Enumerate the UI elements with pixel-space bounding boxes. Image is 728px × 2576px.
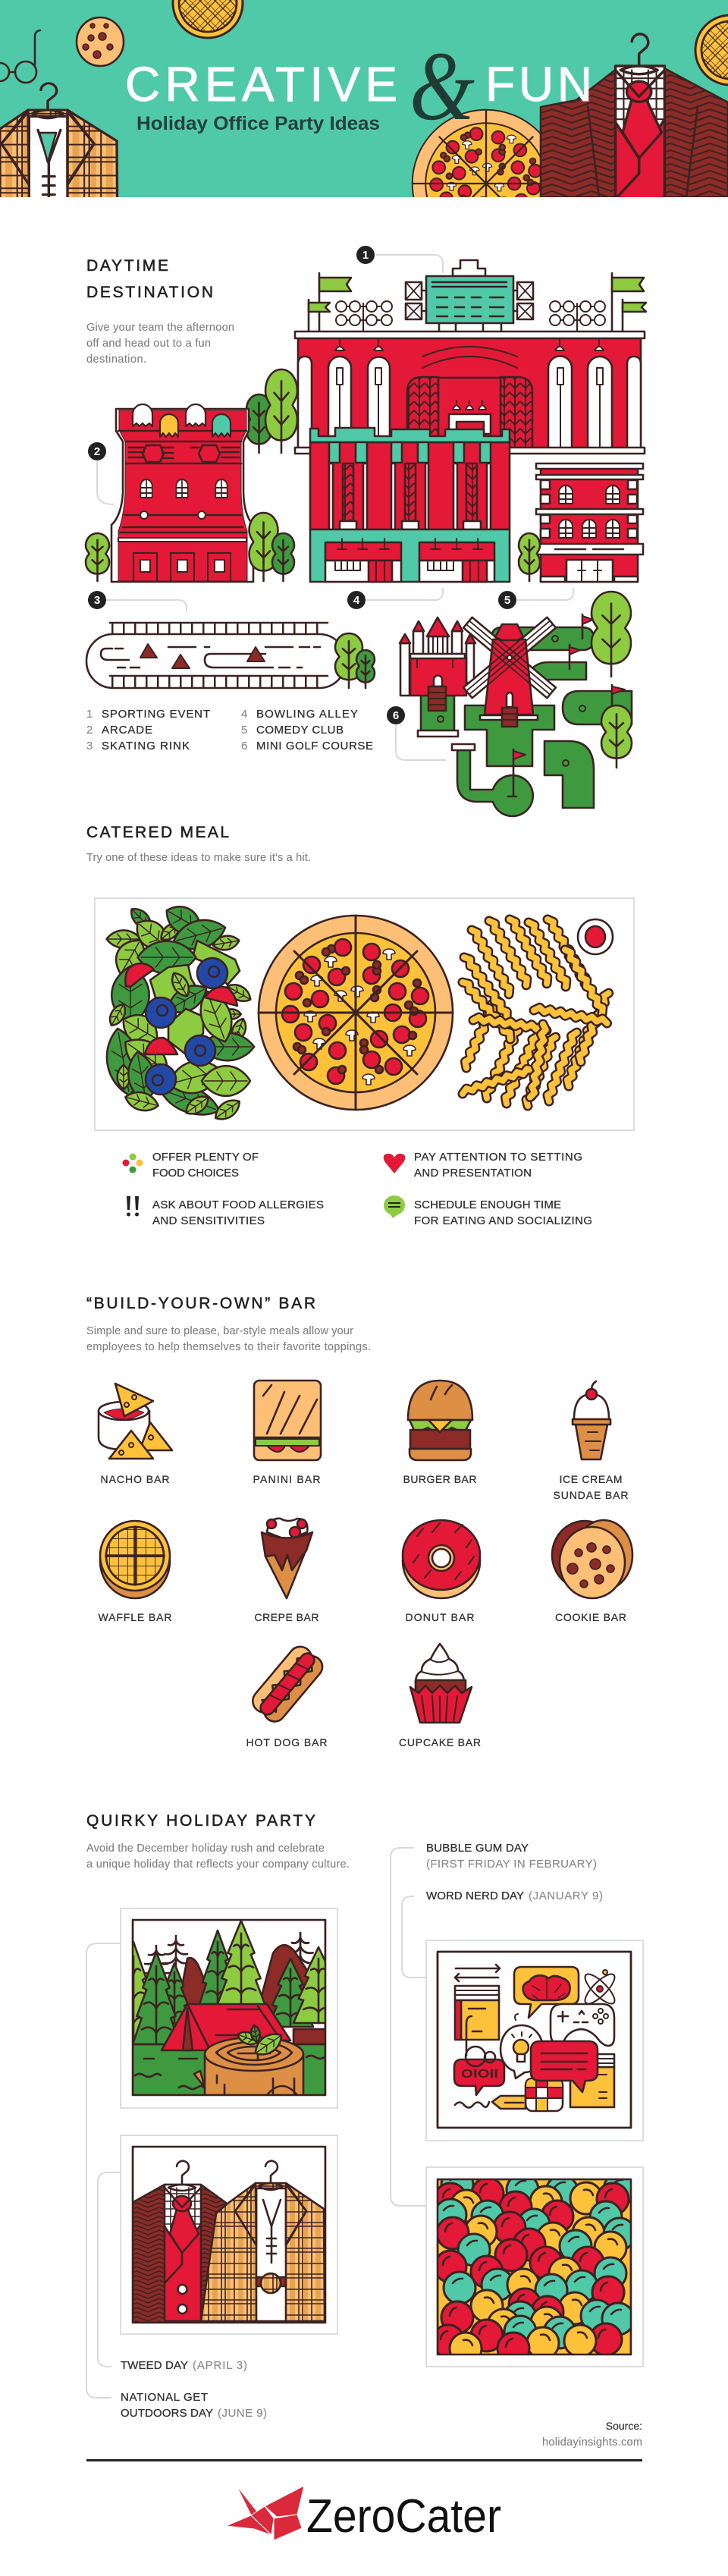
illustration: pizza (259, 916, 453, 1110)
footer rule (86, 2459, 642, 2461)
panel: bubble gum balls (426, 2167, 643, 2367)
icon: cupcake bar (410, 1644, 472, 1723)
illustration: bowling alley (310, 428, 510, 582)
tip: food choices: OFFER PLENTY OF (152, 1151, 259, 1164)
panel: word nerd illustration (426, 1940, 643, 2141)
intro text: Try one of these ideas to make sure it's a hit. (86, 852, 311, 864)
floodlights (336, 301, 605, 331)
intro text: Simple and sure to please, bar-style meals allow your (86, 1325, 353, 1337)
heading: QUIRKY HOLIDAY PARTY (86, 1812, 315, 1830)
book (455, 1986, 499, 2056)
trees behind stadium (246, 369, 297, 453)
heading: CATERED MEAL (86, 824, 229, 841)
tip: allergies (127, 1196, 324, 1227)
small red bubble with binary (454, 2047, 504, 2095)
icon captions: ICE CREAM (560, 1473, 622, 1485)
section: catered meal (86, 824, 634, 1227)
arrows (455, 1965, 500, 1981)
intro text (86, 1325, 371, 1353)
icon: waffle top (173, 0, 243, 38)
illustration: fusilli pasta (461, 918, 609, 1106)
tip: setting and presentation (384, 1151, 582, 1180)
icon captions: COOKIE BAR (555, 1611, 626, 1623)
icon captions: CUPCAKE BAR (399, 1736, 481, 1748)
section: quirky holiday party (86, 1812, 643, 2420)
food frame (95, 898, 634, 1130)
numbered badges: 2 (94, 445, 100, 458)
icon: waffle right (695, 15, 728, 85)
label: bubble gum day: (FIRST FRIDAY IN FEBRUARY) (426, 1858, 597, 1871)
icon: donut bar (403, 1520, 480, 1598)
icon: panini bar (254, 1381, 321, 1460)
holiday labels (121, 1842, 603, 2420)
intro text: off and head out to a fun (86, 338, 211, 350)
label: word nerd day: (JANUARY 9) (529, 1890, 603, 1902)
label: national get outdoors day: NATIONAL GET (121, 2391, 208, 2404)
label: tweed day: TWEED DAY (121, 2359, 188, 2372)
legend list: 4 (241, 708, 247, 721)
tip: allergies: ASK ABOUT FOOD ALLERGIES (152, 1198, 324, 1211)
illustration: arcade (111, 404, 253, 582)
intro text (86, 1842, 350, 1871)
legend list: 6 (241, 740, 247, 752)
tip: food choices: FOOD CHOICES (152, 1167, 239, 1180)
icon captions: HOT DOG BAR (246, 1736, 328, 1748)
icon captions: BURGER BAR (403, 1473, 476, 1485)
second book (570, 2054, 614, 2107)
icon: cookie bar (552, 1520, 632, 1598)
label: tweed day (121, 2359, 247, 2372)
legend list: ARCADE (102, 724, 152, 737)
arcade ghosts (133, 404, 231, 437)
label: national get outdoors day: (JUNE 9) (218, 2407, 267, 2420)
tip: setting and presentation: AND PRESENTATION (414, 1167, 532, 1180)
illustration: tan tweed jacket (0, 82, 118, 197)
golf greens (421, 627, 632, 816)
stage (449, 401, 491, 434)
icon captions (99, 1473, 628, 1748)
icon: burger bar (408, 1381, 472, 1460)
tip: enough time (384, 1195, 592, 1227)
legend list: SPORTING EVENT (102, 708, 210, 721)
map illustrations (86, 260, 646, 816)
speech bubble with brain (514, 1967, 579, 2018)
game controller (551, 2004, 614, 2046)
numbered badges (88, 246, 516, 724)
icon: glasses (0, 30, 40, 83)
checkered cube (526, 2078, 563, 2111)
legend list: SKATING RINK (102, 740, 190, 752)
connector lines (86, 1848, 426, 2398)
label: word nerd day: WORD NERD DAY (426, 1890, 524, 1902)
icon: waffle bar (100, 1521, 170, 1598)
section: daytime destination (86, 246, 646, 816)
legend list: MINI GOLF COURSE (256, 740, 373, 752)
title: CREATIVE (125, 57, 397, 112)
legend list: 3 (86, 740, 93, 752)
icon: crepe bar (262, 1519, 312, 1598)
numbered badges: 3 (94, 594, 100, 607)
title (125, 32, 592, 141)
illustration: comedy club (536, 463, 643, 582)
heading (86, 257, 213, 301)
food icon grid (99, 1381, 632, 1726)
wordmark: ZeroCater (306, 2490, 501, 2543)
illustration: skating rink (86, 623, 375, 688)
icon captions: SUNDAE BAR (554, 1489, 628, 1501)
legend list (86, 708, 373, 752)
pencil (492, 2096, 526, 2109)
label: bubble gum day (426, 1842, 597, 1871)
icon captions: DONUT BAR (405, 1611, 475, 1623)
illustration: salad (102, 900, 254, 1124)
heading: DAYTIME (86, 257, 168, 275)
tip: food choices (123, 1151, 259, 1180)
numbered badges: 4 (353, 594, 360, 607)
large red bubble (531, 2041, 598, 2092)
intro text (86, 322, 234, 366)
numbered badges: 5 (504, 594, 510, 607)
subtitle: Holiday Office Party Ideas (136, 113, 380, 134)
panel: forest camping (111, 1908, 344, 2108)
heading: “BUILD-YOUR-OWN” BAR (86, 1295, 315, 1312)
icon: paper crane (226, 2486, 304, 2540)
label: bubble gum day: BUBBLE GUM DAY (426, 1842, 529, 1855)
title: FUN (485, 57, 592, 112)
connector lines (97, 255, 573, 760)
source note (542, 2420, 642, 2449)
section: build-your-own bar (86, 1295, 632, 1748)
tip: setting and presentation: PAY ATTENTION TO SETTING (414, 1151, 582, 1164)
intro text: destination. (86, 353, 146, 366)
label: word nerd day (426, 1890, 603, 1902)
icon captions: WAFFLE BAR (99, 1611, 171, 1623)
tip: enough time: SCHEDULE ENOUGH TIME (414, 1198, 561, 1211)
atom (581, 1970, 619, 2008)
label: tweed day: (APRIL 3) (193, 2359, 247, 2372)
legend list: 1 (86, 708, 93, 721)
icon: nacho bar (99, 1384, 172, 1459)
legend list: 5 (241, 724, 247, 737)
numbered badges: 6 (393, 709, 399, 722)
windmill (463, 617, 556, 727)
lightbulb bubble (500, 2014, 543, 2078)
icon: dipping sauce (578, 919, 613, 954)
scoreboard (406, 260, 533, 331)
source note: Source: (606, 2420, 642, 2432)
legend list: COMEDY CLUB (256, 724, 344, 737)
intro text: a unique holiday that reflects your company culture. (86, 1858, 350, 1871)
castle (400, 617, 475, 711)
legend list: BOWLING ALLEY (256, 708, 358, 721)
footer logo (226, 2486, 501, 2543)
stage curtains (407, 377, 532, 448)
tip: enough time: FOR EATING AND SOCIALIZING (414, 1214, 592, 1227)
illustration: stadium (295, 260, 646, 454)
numbered badges: 1 (362, 249, 369, 262)
header banner (0, 0, 728, 197)
legend list: 2 (86, 724, 93, 737)
illustration: mini golf course (400, 592, 632, 816)
icon captions: NACHO BAR (100, 1473, 170, 1485)
intro text: employees to help themselves to their favorite toppings. (86, 1341, 371, 1353)
icon: hot dog bar (248, 1642, 327, 1726)
label: national get outdoors day (121, 2391, 267, 2420)
title: & (410, 32, 475, 141)
intro text: Give your team the afternoon (86, 322, 234, 334)
tips (123, 1151, 592, 1227)
golf flags (508, 614, 625, 796)
small red bubble with binary: OIOII (461, 2068, 498, 2081)
illustration: pizza (411, 109, 540, 197)
illustration: brown herringbone jacket (540, 33, 728, 197)
tip: allergies: AND SENSITIVITIES (152, 1214, 265, 1227)
heading: DESTINATION (86, 284, 213, 301)
icon: ice cream sundae bar (573, 1381, 610, 1459)
icon captions: CREPE BAR (255, 1611, 318, 1623)
header food and clothing illustrations (0, 0, 728, 275)
source note: holidayinsights.com (542, 2436, 642, 2449)
trees around buildings (86, 513, 540, 581)
flags (309, 273, 646, 331)
panel: tweed jackets (121, 2135, 337, 2334)
label: national get outdoors day: OUTDOORS DAY (121, 2407, 213, 2420)
icon captions: PANINI BAR (253, 1473, 320, 1485)
intro text: Avoid the December holiday rush and celebrate (86, 1842, 325, 1855)
icon: cookie (77, 17, 124, 66)
